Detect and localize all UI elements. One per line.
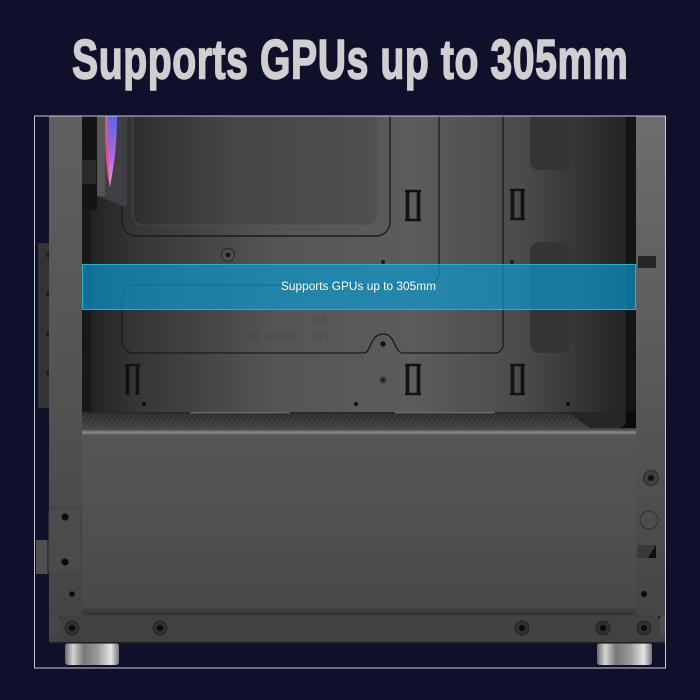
upper latch	[638, 256, 656, 268]
fan and cables	[82, 116, 127, 210]
fan RGB glow	[105, 116, 117, 187]
lower latch	[637, 545, 656, 558]
cable tie brackets	[125, 189, 525, 395]
PSU shroud	[82, 435, 636, 615]
feet	[65, 643, 652, 665]
tray slots	[530, 116, 569, 170]
highlight banner: GPU clearance	[82, 264, 636, 310]
title: Supports GPUs up to 305mm	[72, 29, 628, 91]
form factor markings	[249, 315, 331, 343]
motherboard tray	[82, 116, 636, 413]
upper cut-out recess	[133, 116, 378, 225]
standoff screws	[104, 248, 570, 406]
form factor markings: ATX	[312, 332, 331, 343]
hinge	[36, 508, 81, 597]
form factor markings: ITX	[312, 315, 328, 326]
form factor markings: J	[251, 315, 256, 326]
screw	[644, 470, 658, 486]
vent floor	[82, 412, 636, 435]
bottom rail	[49, 615, 665, 644]
left side rail	[49, 116, 82, 616]
back panel strip	[38, 243, 52, 408]
form factor markings: A1	[249, 332, 262, 343]
case photo: front view of chassis	[36, 116, 665, 665]
motherboard outline	[122, 116, 503, 353]
form factor markings: MICRO	[265, 332, 299, 343]
frame outline	[34, 116, 666, 668]
right side rail	[636, 116, 665, 616]
banner label: Supports GPUs up to 305mm	[281, 279, 436, 293]
knockout circle	[640, 511, 658, 529]
